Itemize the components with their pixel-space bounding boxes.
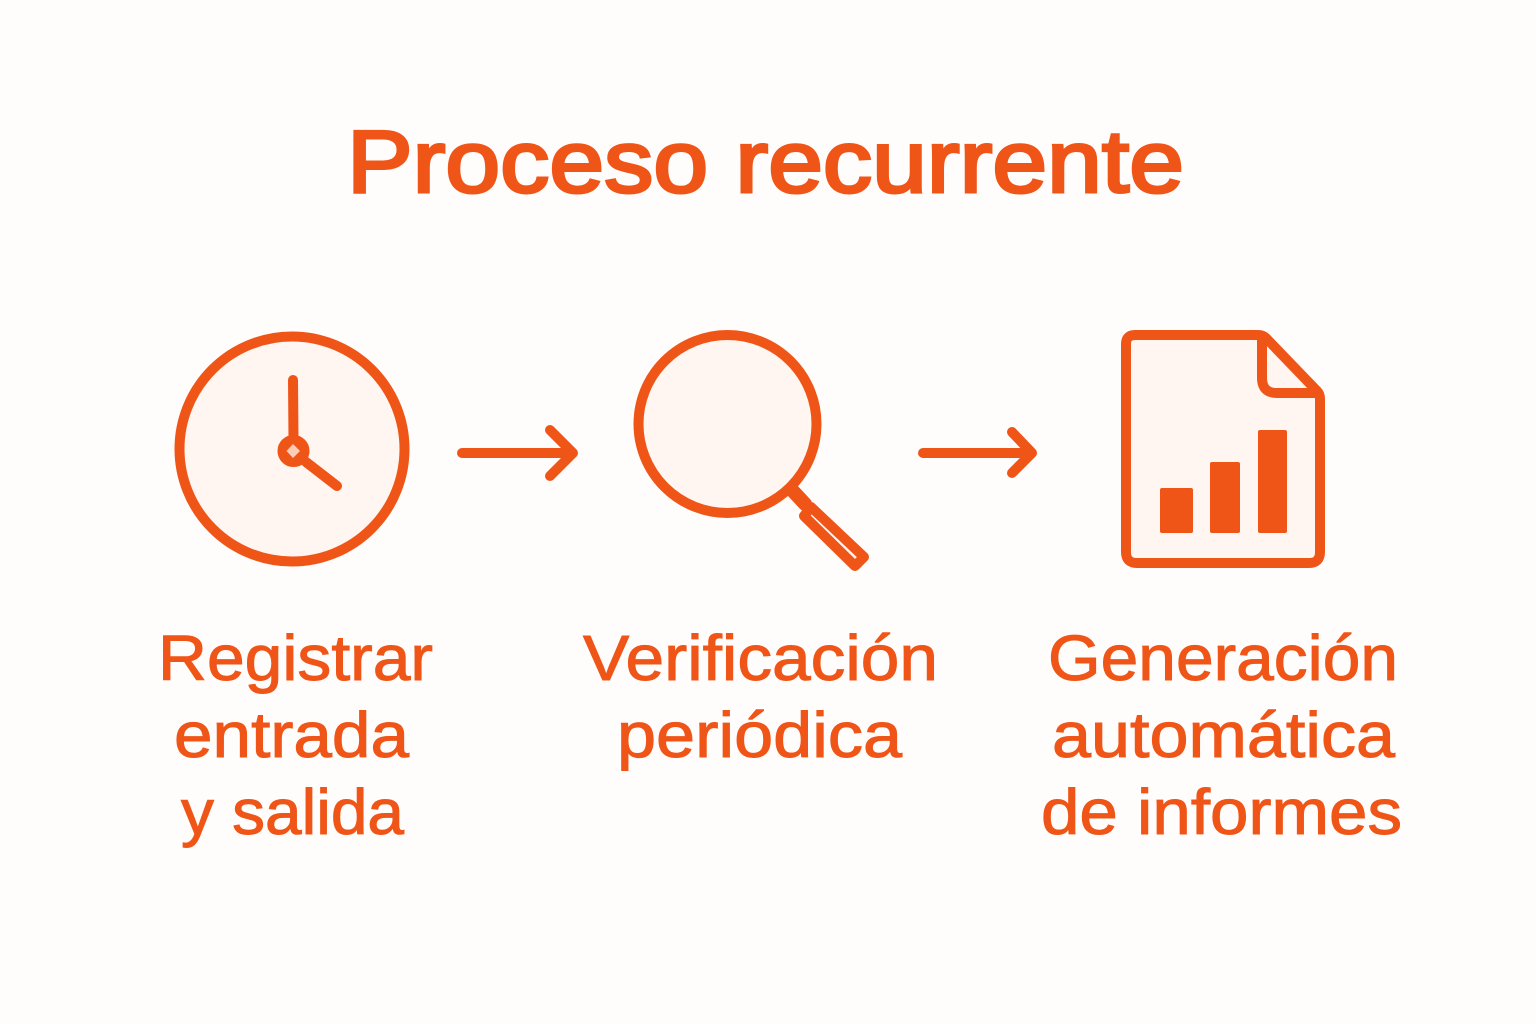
icon: report document with bar chart: [1126, 335, 1320, 563]
label: step 2: periódica: [617, 699, 902, 771]
label: step 1: Registrar: [158, 622, 433, 694]
icon: clock: [180, 336, 404, 562]
arrow: step 2 to step 3: [923, 432, 1032, 473]
label: step 1: y salida: [181, 776, 404, 848]
label: step 1: [158, 622, 433, 848]
label: step 2: Verificación: [583, 622, 938, 694]
arrow: step 1 to step 2: [462, 430, 573, 476]
label: step 3: de informes: [1041, 776, 1402, 848]
title: Proceso recurrente: [347, 112, 1184, 211]
label: step 3: [1041, 622, 1402, 848]
label: step 3: Generación: [1048, 622, 1398, 694]
icon: magnifying glass: [638, 335, 864, 566]
label: step 2: [583, 622, 938, 771]
label: step 3: automática: [1052, 699, 1395, 771]
label: step 1: entrada: [174, 699, 409, 771]
